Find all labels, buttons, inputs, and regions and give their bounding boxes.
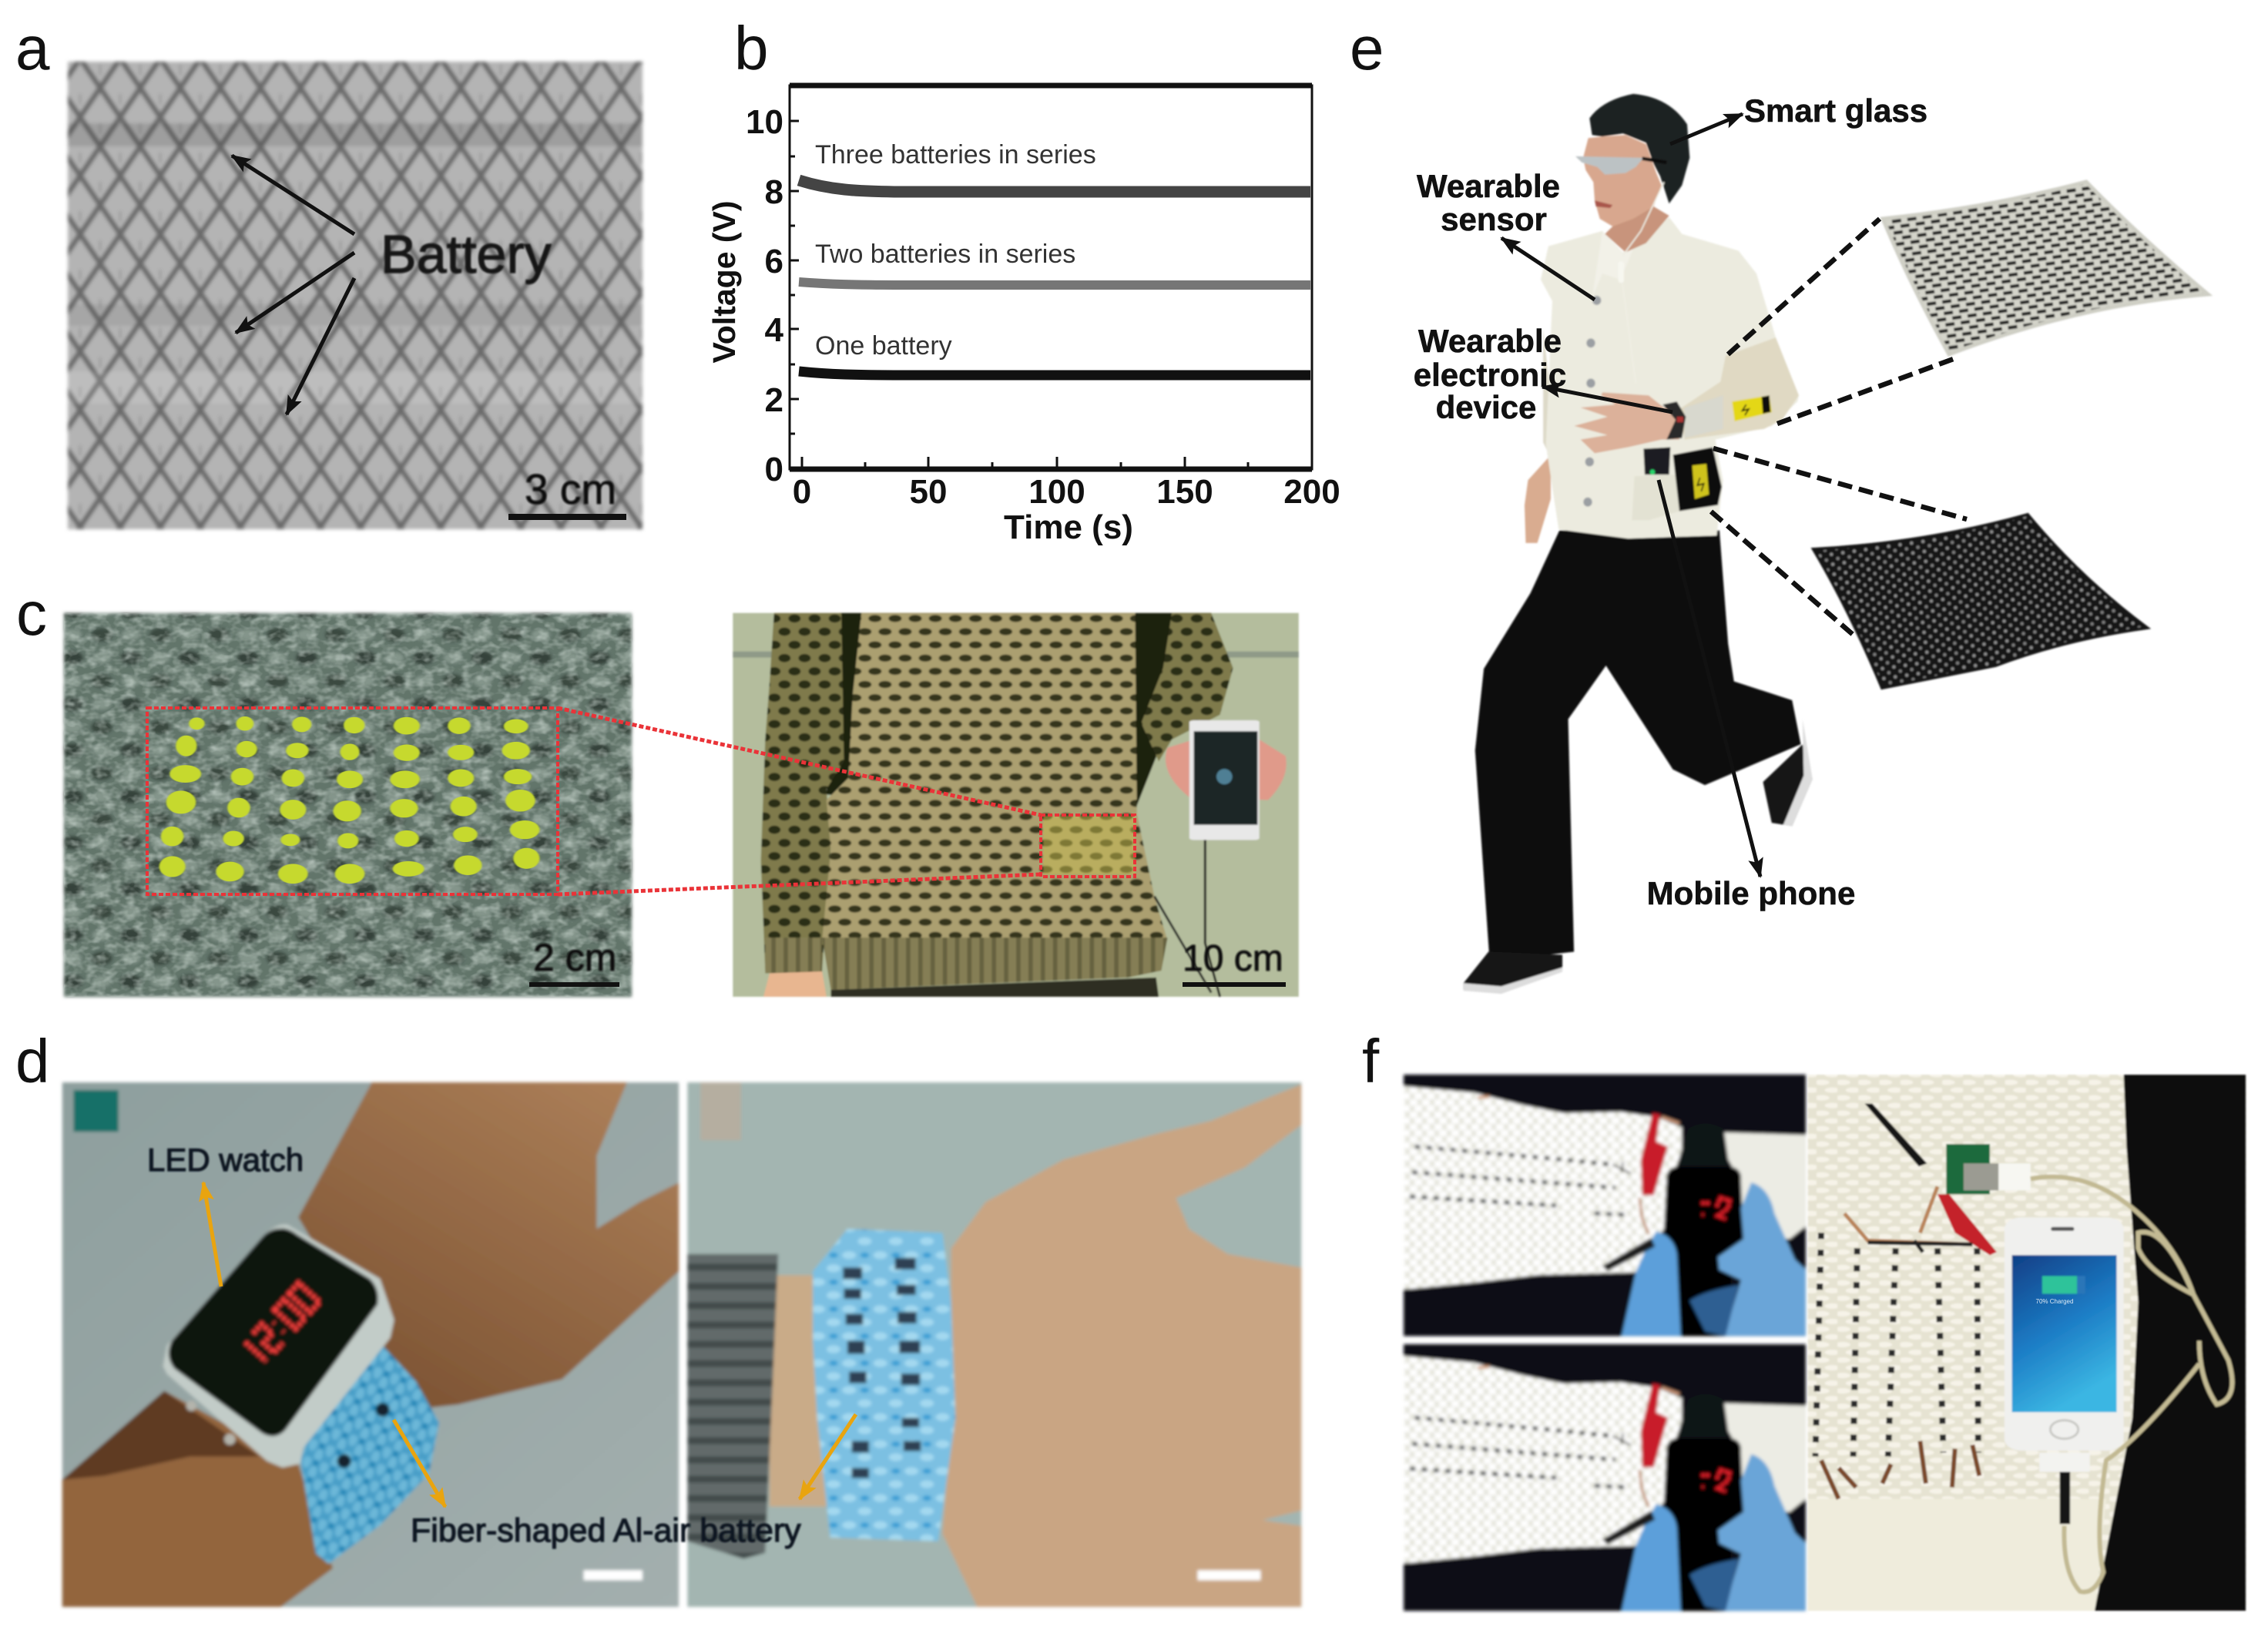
arrow: [236, 253, 354, 333]
label smart glass: Smart glass: [1744, 92, 1927, 129]
y axis tick labels: 4: [765, 311, 784, 349]
dashed zoom lines: [1711, 219, 1967, 637]
gray fabric swatch: [1883, 182, 2208, 354]
arrow: [287, 278, 354, 414]
series: one battery: [799, 371, 1310, 375]
series: three batteries: [799, 180, 1310, 192]
label mobile phone: Mobile phone: [1647, 875, 1855, 911]
y axis tick labels: [746, 103, 784, 488]
shirt body: [1541, 217, 1799, 538]
panel c: sweater with integrated batteries: [16, 579, 1299, 997]
panel e: wearable system illustration: [1350, 14, 2208, 994]
label a: a: [15, 14, 50, 82]
running figure: [1464, 94, 1813, 994]
scale bar: [1183, 982, 1286, 987]
label f: f: [1362, 1027, 1380, 1095]
y axis tick labels: 10: [746, 103, 783, 141]
arrow to electronic device: [1542, 387, 1672, 412]
right photo: [687, 1082, 1301, 1607]
scale label: 2 cm: [533, 936, 616, 979]
series label: One battery: [815, 331, 952, 361]
series label: Two batteries in series: [815, 240, 1075, 269]
scale label: 10 cm: [1183, 938, 1283, 979]
label e: e: [1350, 14, 1384, 82]
x axis tick labels: 50: [910, 473, 947, 511]
textile photo: [68, 62, 642, 529]
pocket, phone and pouch: [1632, 475, 1679, 520]
orange arrow: [203, 1182, 221, 1286]
y axis title: Voltage (V): [706, 200, 742, 364]
close-up photo: [64, 613, 632, 997]
label c: c: [16, 579, 47, 648]
panel f: knit battery charging devices: [1362, 1027, 2246, 1611]
label battery: Fiber-shaped Al-air battery: [411, 1512, 801, 1549]
red zoom callout: [147, 708, 1135, 894]
sweater photo: [733, 613, 1299, 997]
arrow to mobile phone: [1659, 480, 1760, 877]
plot frame: [790, 86, 1312, 469]
scale label: 3 cm: [525, 465, 616, 513]
label b: b: [734, 14, 769, 82]
x axis tick labels: 200: [1283, 473, 1340, 511]
orange arrow: [800, 1414, 856, 1499]
left photo: [62, 1082, 679, 1607]
series label: Three batteries in series: [815, 140, 1096, 169]
photo: watch top: [1404, 1075, 1806, 1336]
phone status text: 70% Charged: [2036, 1298, 2073, 1305]
label LED watch: LED watch: [147, 1142, 304, 1178]
scale bar: [508, 514, 626, 520]
photo: phone charging: [1808, 1075, 2246, 1611]
label wearable electronic device: Wearable: [1418, 323, 1562, 359]
label Battery: Battery: [381, 224, 552, 284]
label wearable sensor: sensor: [1441, 201, 1547, 237]
hand and watch: [1574, 392, 1679, 453]
shirt buttons: [1583, 296, 1601, 507]
scale bar: [529, 982, 619, 987]
panel d: LED watch powered by battery band: [15, 1027, 1301, 1607]
neck and head: [1605, 206, 1669, 252]
x axis tick labels: 100: [1028, 473, 1085, 511]
y axis tick labels: 0: [765, 451, 783, 488]
series: two batteries: [799, 282, 1310, 285]
black fabric swatch: [1813, 515, 2147, 688]
panel b: voltage line chart: [706, 14, 1340, 546]
x axis tick labels: 0: [793, 473, 811, 511]
y axis tick labels: 8: [765, 173, 783, 211]
label wearable sensor: Wearable: [1417, 168, 1560, 204]
panel a: knitted battery textile: [15, 14, 642, 529]
x axis title: Time (s): [1004, 508, 1133, 546]
x axis tick labels: 150: [1156, 473, 1213, 511]
photo: watch bottom: [1404, 1344, 1806, 1611]
label wearable electronic device: device: [1436, 389, 1536, 425]
orange arrow: [394, 1420, 445, 1507]
arrow: [232, 156, 354, 234]
label d: d: [15, 1027, 49, 1095]
y axis tick labels: 6: [765, 243, 783, 280]
x axis tick labels: [793, 473, 1340, 511]
label wearable electronic device: electronic: [1414, 357, 1566, 393]
band and watch in true-aspect crop coordinates: [163, 1225, 439, 1564]
arrow to smart glass: [1670, 114, 1743, 144]
arrow to wearable sensor: [1501, 238, 1595, 300]
y axis tick labels: 2: [765, 381, 783, 419]
